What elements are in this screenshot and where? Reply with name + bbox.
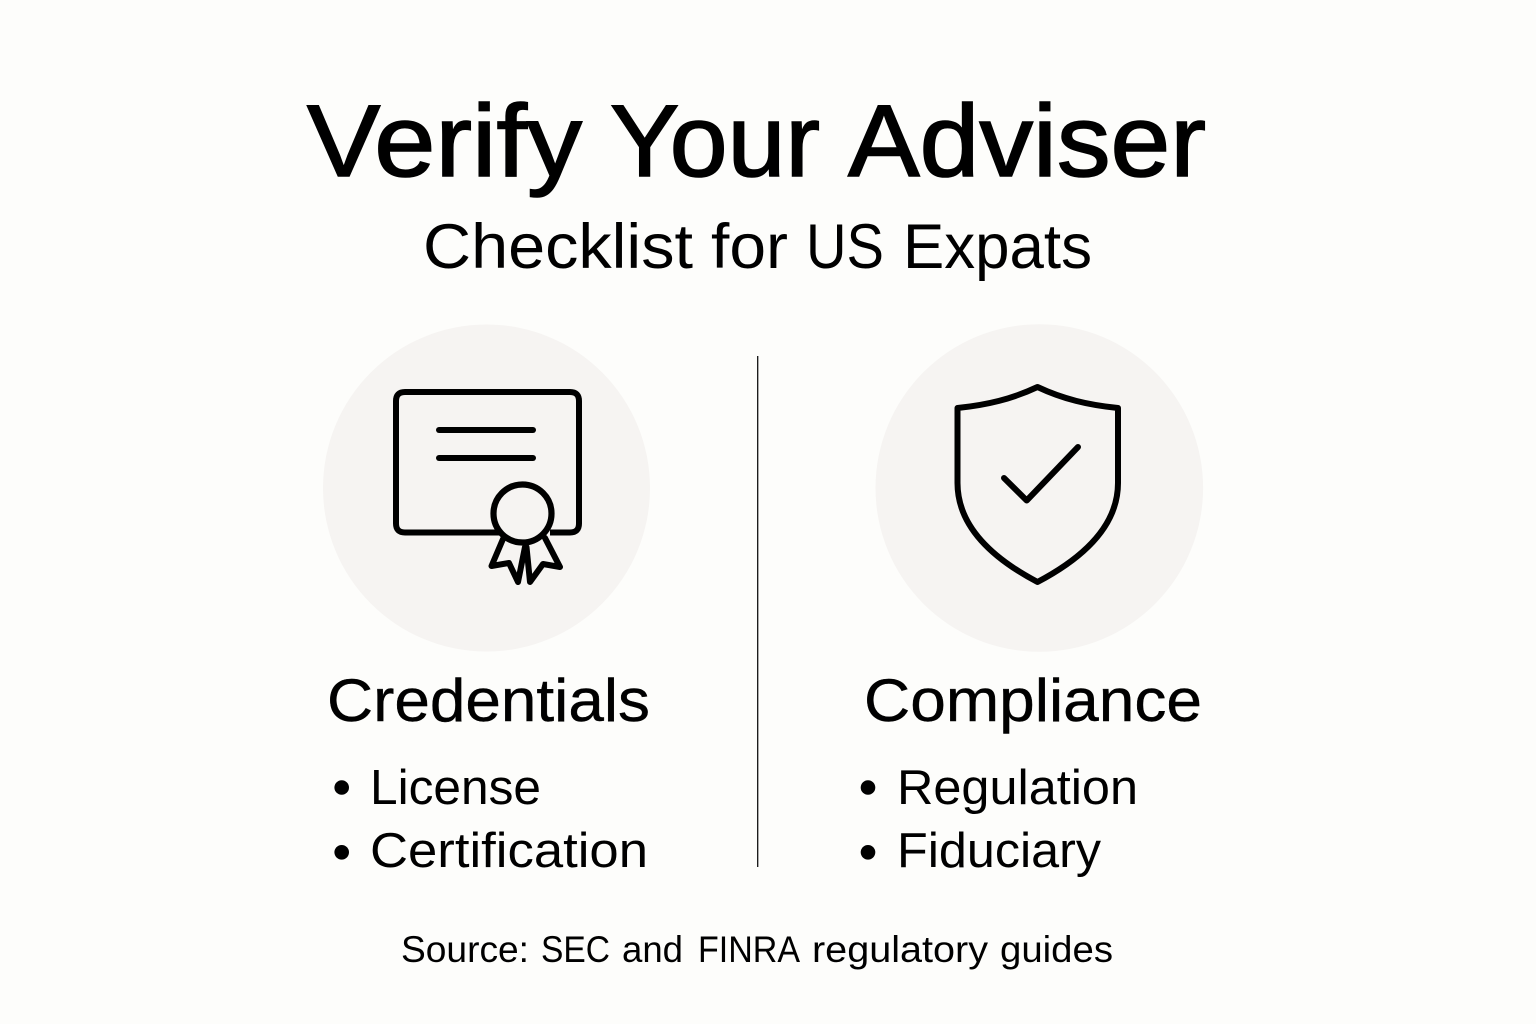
list: credentials [334,761,648,878]
icon: shield with check [876,324,1203,652]
subtitle [423,212,1092,282]
list: credentials: License [370,761,541,815]
source note: SEC [541,929,610,970]
list: credentials: Certification [370,824,648,878]
list: compliance: Fiduciary [897,824,1102,878]
source note [401,929,1113,970]
divider [757,356,759,867]
title [307,84,1206,198]
source note: guides [1000,929,1113,970]
source note: and [622,929,683,970]
heading: credentials: Credentials [327,667,650,734]
source note: FINRA [698,929,800,970]
list: compliance: Regulation [897,761,1138,815]
list: compliance [861,761,1138,878]
heading: compliance: Compliance [864,667,1202,734]
subtitle: Expats [903,212,1092,282]
subtitle: for [711,212,788,282]
title: Your [610,84,820,198]
icon: certificate [323,324,650,652]
panel: credentials [323,324,650,878]
panel: compliance [861,324,1203,878]
title: Adviser [848,84,1206,198]
source note: regulatory [812,929,989,970]
subtitle: Checklist [423,212,694,282]
subtitle: US [806,212,884,282]
title: Verify [307,84,582,198]
source note: Source: [401,929,529,970]
